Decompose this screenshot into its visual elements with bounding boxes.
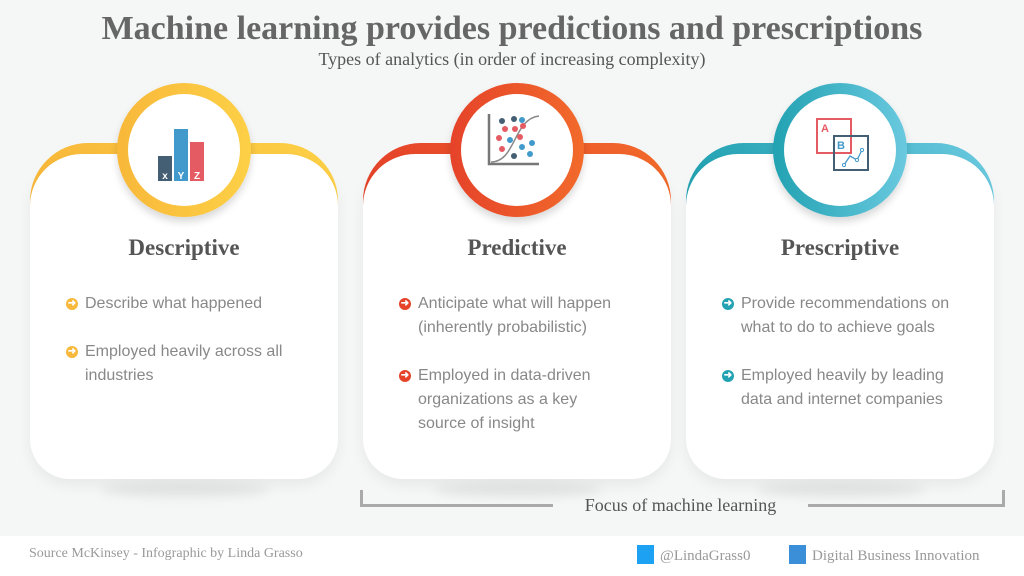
bullets: ➜: [724, 370, 732, 381]
bullets: source of insight: [418, 415, 535, 432]
bullets: Employed in data-driven: [418, 367, 591, 384]
brand: Digital Business Innovation: [812, 548, 980, 564]
bullets: ➜: [68, 346, 76, 357]
bullets: [722, 295, 949, 408]
bracket: focus of machine learning: [360, 490, 1005, 515]
bullets: Employed heavily across all: [85, 343, 282, 360]
panel: predictive: [363, 83, 671, 498]
bullets: what to do to achieve goals: [741, 319, 935, 336]
subtitle: Types of analytics (in order of increasing complexity): [318, 49, 706, 69]
bullets: organizations as a key: [418, 391, 577, 408]
icon: bar chart circle: Z: [194, 171, 200, 182]
twitter handle: @LindaGrass0: [660, 548, 750, 564]
bracket: focus of machine learning: Focus of machine learning: [585, 495, 776, 515]
heading: Prescriptive: [781, 235, 899, 260]
icon: bar chart circle: x: [162, 171, 168, 182]
bullets: ➜: [401, 370, 409, 381]
icon: A/B circle: [773, 83, 907, 217]
bullets: [399, 295, 611, 432]
icon: scatter chart circle: [450, 83, 584, 217]
bullets: Describe what happened: [85, 295, 262, 312]
bullets: [66, 295, 282, 384]
icon: bar chart circle: Y: [178, 171, 185, 182]
source text: Source McKinsey - Infographic by Linda Grasso: [29, 546, 303, 561]
bullets: Anticipate what will happen: [418, 295, 611, 312]
panel: prescriptive: [686, 83, 994, 498]
bullets: ➜: [401, 298, 409, 309]
icon: A/B circle: A: [821, 123, 829, 135]
twitter handle: [637, 545, 750, 564]
bullets: Provide recommendations on: [741, 295, 949, 312]
title: Machine learning provides predictions and prescriptions: [102, 10, 922, 47]
icon: A/B circle: B: [837, 140, 845, 152]
footer: [0, 536, 1024, 576]
bullets: ➜: [724, 298, 732, 309]
bullets: ➜: [68, 298, 76, 309]
heading: Descriptive: [128, 235, 240, 260]
bullets: industries: [85, 367, 153, 384]
heading: Predictive: [467, 235, 567, 260]
bullets: data and internet companies: [741, 391, 943, 408]
panel: descriptive: [30, 83, 338, 498]
icon: bar chart circle: [117, 83, 251, 217]
bullets: Employed heavily by leading: [741, 367, 944, 384]
bullets: (inherently probabilistic): [418, 319, 587, 336]
